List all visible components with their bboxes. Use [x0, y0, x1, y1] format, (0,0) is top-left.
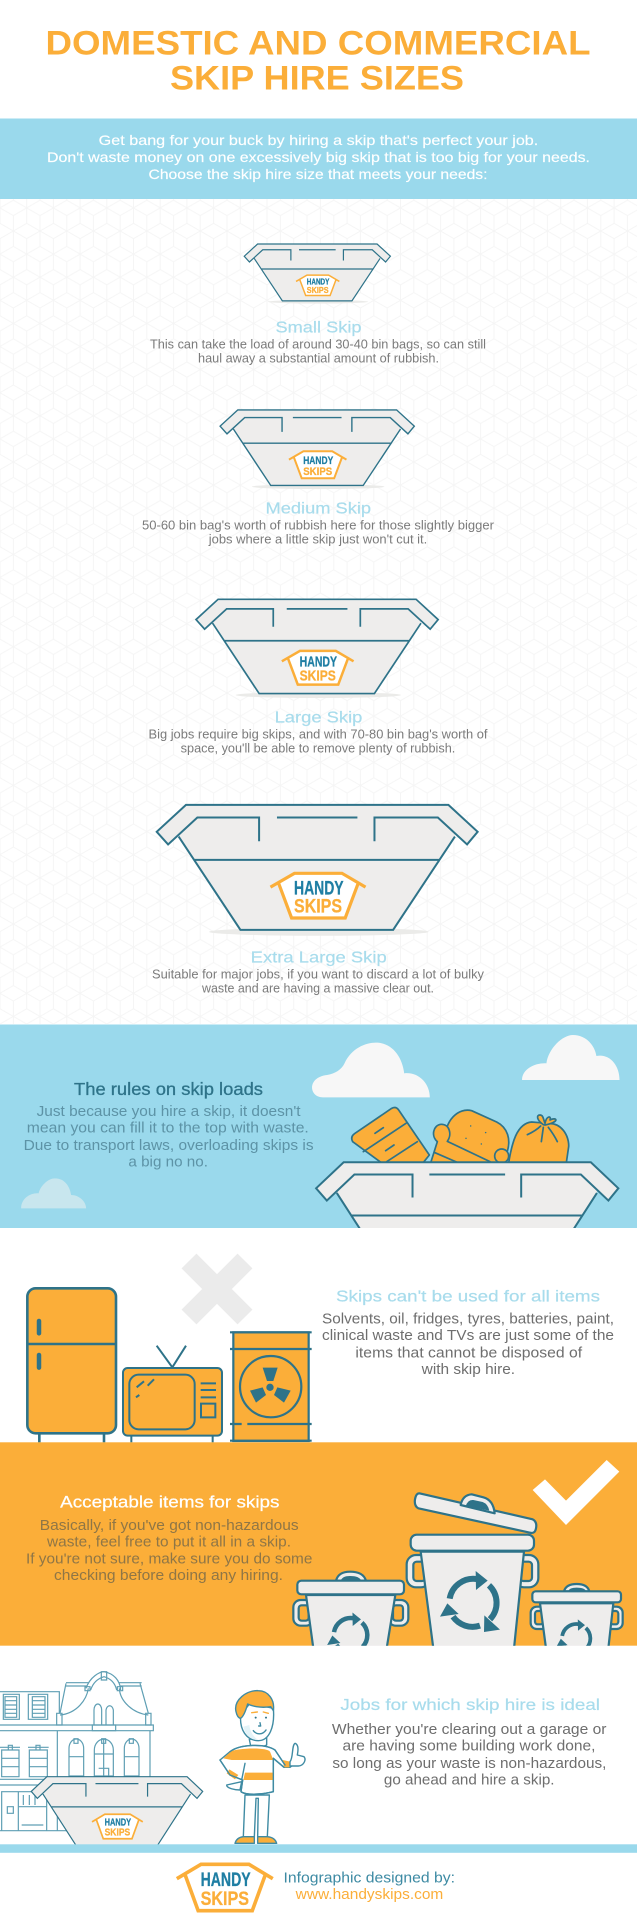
acceptable items text: Acceptable items for skips: [60, 1493, 280, 1512]
icon: townhouse: [0, 1672, 153, 1831]
panel: white lower section covers bin overflow: [0, 1646, 637, 1924]
small skip illustration: HANDY: [307, 277, 329, 287]
large skip illustration: HANDY: [300, 655, 337, 671]
acceptable items text: checking before doing any hiring.: [54, 1568, 283, 1584]
extra large skip text: Extra Large Skip: [251, 950, 387, 967]
prohibited items icons: [27, 1288, 312, 1442]
icon: television: [123, 1346, 222, 1442]
footer credit: [284, 1869, 455, 1903]
icon: check mark: [533, 1460, 619, 1525]
title: [46, 24, 590, 98]
icon: rubbish items: [352, 1107, 569, 1167]
panel: acceptable items background: [0, 1442, 637, 1646]
small skip text: This can take the load of around 30-40 bin bags, so can still: [150, 337, 486, 351]
skips cannot be used text: [322, 1289, 614, 1378]
large skip text: [148, 710, 488, 755]
extra large skip illustration: SKIPS: [294, 897, 342, 917]
medium skip illustration: SKIPS: [303, 465, 332, 478]
footer credit: www.handyskips.com: [295, 1886, 443, 1903]
large skip illustration: SKIPS: [300, 669, 336, 684]
rules text: mean you can fill it to the top with waste.: [27, 1121, 309, 1137]
large skip text: Large Skip: [275, 710, 363, 727]
skips cannot be used text: items that cannot be disposed of: [355, 1345, 583, 1361]
panel: patterned sizes background: [0, 199, 637, 1024]
footer credit: Infographic designed by:: [284, 1869, 455, 1886]
icon: large bin: [407, 1493, 538, 1648]
icon: drawers: [352, 1107, 429, 1167]
skips cannot be used text: Solvents, oil, fridges, tyres, batteries, paint,: [322, 1311, 614, 1327]
acceptable items text: If you're not sure, make sure you do some: [26, 1551, 312, 1567]
icon: cross: [189, 1261, 245, 1317]
footer logo: HANDY: [201, 1869, 251, 1891]
icon: right bin: [531, 1584, 623, 1653]
small skip illustration: [244, 244, 390, 304]
extra large skip text: [152, 950, 485, 996]
panel: rules on skip loads background: [0, 1024, 637, 1228]
large skip text: Big jobs require big skips, and with 70-80 bin bag's worth of: [148, 728, 488, 742]
panel: intro band: Choose the skip hire size that meets your needs:: [148, 166, 488, 182]
jobs skip illustration: HANDY: [105, 1818, 131, 1829]
extra large skip text: Suitable for major jobs, if you want to discard a lot of bulky: [152, 968, 485, 982]
extra large skip illustration: [157, 805, 478, 936]
rules text: Just because you hire a skip, it doesn't: [37, 1104, 301, 1120]
medium skip text: [142, 500, 494, 546]
rules text: a big no no.: [128, 1155, 208, 1171]
skips cannot be used text: with skip hire.: [421, 1362, 515, 1378]
acceptable items text: [26, 1493, 312, 1584]
small skip text: Small Skip: [276, 319, 362, 336]
small skip text: haul away a substantial amount of rubbish.: [198, 351, 439, 365]
large skip illustration: [196, 599, 438, 698]
panel: intro band: Get bang for your buck by hiring a skip that's perfect your job.: [99, 132, 538, 148]
icon: armchair: [430, 1110, 509, 1165]
extra large skip text: waste and are having a massive clear out.: [201, 982, 434, 996]
title: SKIP HIRE SIZES: [170, 60, 464, 98]
jobs skip illustration: [31, 1777, 203, 1845]
panel: intro band: [0, 118, 637, 199]
rules text: [24, 1079, 314, 1171]
icon: rubbish bag: [508, 1115, 569, 1165]
clouds: [21, 1035, 620, 1208]
jobs text: are having some building work done,: [342, 1739, 596, 1755]
rules text: Due to transport laws, overloading skips is: [24, 1138, 314, 1154]
load skip illustration: [316, 1162, 618, 1283]
icon: left bin: [293, 1572, 408, 1652]
jobs text: so long as your waste is non-hazardous,: [332, 1756, 606, 1772]
medium skip text: jobs where a little skip just won't cut it.: [208, 532, 427, 546]
jobs text: Whether you're clearing out a garage or: [332, 1722, 607, 1738]
medium skip text: 50-60 bin bag's worth of rubbish here for those slightly bigger: [142, 518, 494, 532]
panel: intro band: Don't waste money on one excessively big skip that is too big for your needs.: [47, 149, 590, 165]
icon: fridge: [27, 1288, 116, 1442]
acceptable items text: waste, feel free to put it all in a skip.: [46, 1535, 291, 1551]
rules text: The rules on skip loads: [74, 1079, 263, 1099]
footer logo: [177, 1864, 273, 1911]
jobs text: go ahead and hire a skip.: [384, 1773, 554, 1789]
medium skip illustration: [220, 410, 414, 489]
jobs text: [332, 1697, 607, 1789]
jobs text: Jobs for which skip hire is ideal: [340, 1697, 600, 1714]
extra large skip illustration: HANDY: [294, 878, 344, 899]
medium skip illustration: HANDY: [303, 454, 333, 467]
icon: radioactive barrel: [230, 1332, 312, 1441]
bottom divider band: [0, 1844, 637, 1853]
acceptable items text: Basically, if you've got non-hazardous: [40, 1518, 299, 1534]
footer logo: SKIPS: [201, 1888, 249, 1910]
jobs skip illustration: SKIPS: [105, 1828, 130, 1839]
panel: white section covers skip overflow: [0, 1228, 637, 1442]
icon: check mark and recycling bins: [293, 1460, 623, 1653]
skips cannot be used text: clinical waste and TVs are just some of the: [322, 1328, 614, 1344]
title: DOMESTIC AND COMMERCIAL: [46, 24, 590, 62]
small skip illustration: SKIPS: [307, 285, 329, 295]
skips cannot be used text: Skips can't be used for all items: [336, 1289, 600, 1306]
small skip text: [150, 319, 486, 365]
large skip text: space, you'll be able to remove plenty of rubbish.: [181, 741, 455, 755]
medium skip text: Medium Skip: [266, 500, 371, 518]
icon: man with thumbs up: [220, 1691, 305, 1843]
